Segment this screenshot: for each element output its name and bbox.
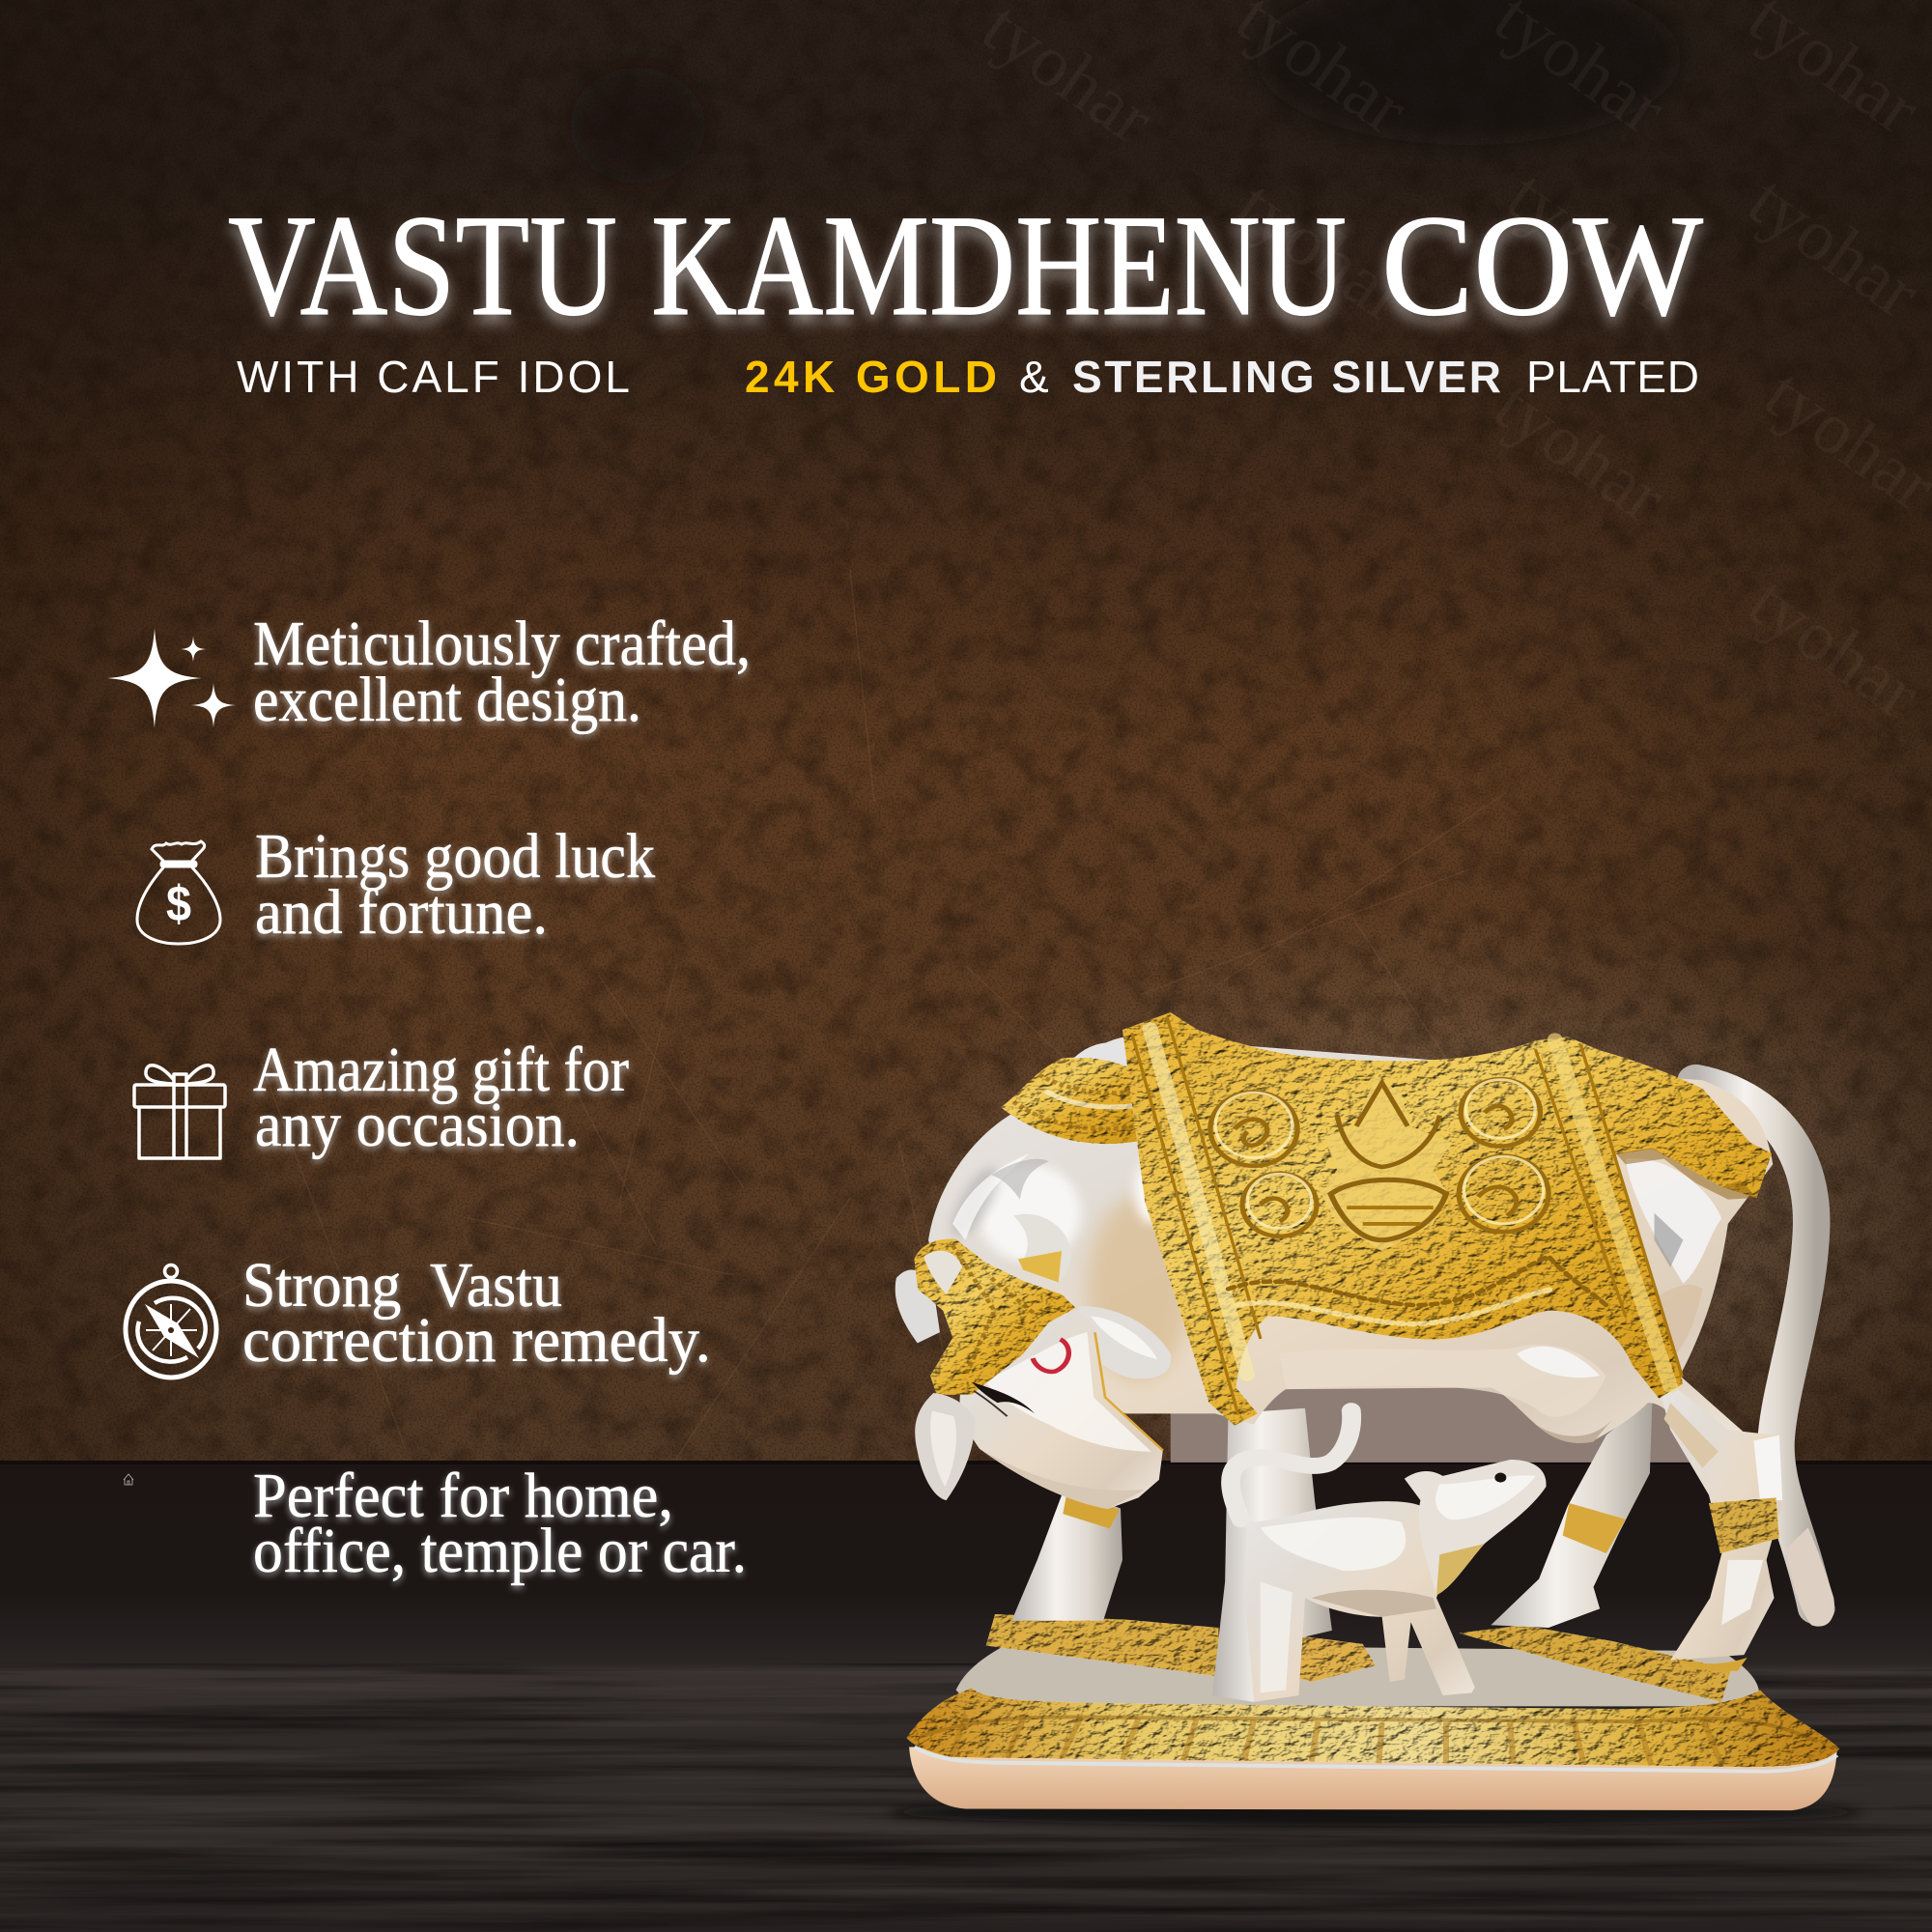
blanket medallions [1210, 1079, 1548, 1236]
feature 1: crafted [107, 609, 751, 735]
calf head [1405, 1460, 1547, 1595]
text: gift: Amazing gift for [253, 1035, 629, 1105]
eye [972, 1382, 1035, 1413]
left ear [915, 1393, 975, 1500]
body shading [944, 1153, 1721, 1443]
text: placement [253, 1461, 747, 1586]
face [960, 1310, 1163, 1509]
feature 4: vastu [126, 1250, 711, 1378]
text: placement: office, temple or car. [253, 1516, 747, 1586]
icon: tiny home [124, 1474, 133, 1485]
neck collar [1001, 1058, 1145, 1144]
subtitle: STERLING SILVER [1072, 352, 1501, 402]
silver hump [1073, 1042, 1127, 1063]
subtitle: WITH CALF IDOL [237, 352, 630, 402]
watermark: tyohar [968, 0, 1932, 734]
residual light backdrop between legs [1171, 1365, 1716, 1463]
tail [1696, 1080, 1834, 1627]
calf tail [1231, 1411, 1351, 1520]
plinth: gold hoof bases [986, 1614, 1731, 1702]
near foreleg [1011, 1487, 1122, 1621]
subtitle: 24K GOLD [745, 352, 997, 402]
text: vastu [242, 1250, 711, 1376]
watermark: tyohar: tyohar [1480, 364, 1680, 538]
background: textured wall [0, 0, 1932, 1488]
title: COW [1381, 185, 1703, 346]
icon: compass [126, 1265, 216, 1378]
subtitle: & [1019, 352, 1049, 402]
title: KAMDHENU [651, 185, 1347, 346]
watermark: tyohar: tyohar [1492, 155, 1692, 328]
icon: money bag [137, 841, 220, 944]
text: crafted: excellent design. [253, 665, 641, 735]
icon: sparkles [107, 628, 236, 728]
text: placement: Perfect for home, [253, 1461, 673, 1531]
base: wooden foot [909, 1747, 1837, 1810]
hind leg: outer [1655, 1370, 1782, 1671]
gold crown [914, 1238, 1076, 1395]
text: crafted [253, 609, 751, 735]
right ear [1078, 1306, 1171, 1378]
blanket [1122, 1012, 1772, 1426]
blanket rear fringe [1616, 1148, 1757, 1200]
title [228, 185, 1703, 346]
title: VASTU [228, 185, 617, 346]
text: luck: Brings good luck [255, 821, 655, 892]
icon: money bag: $ [166, 876, 191, 932]
feature 2: luck [137, 821, 655, 948]
watermark: tyohar: tyohar [1734, 159, 1932, 333]
subtitle: PLATED [1526, 352, 1699, 402]
subtitle [237, 352, 1699, 402]
text: luck [255, 821, 655, 948]
cow head [895, 1214, 1171, 1509]
blanket deity [1321, 1075, 1453, 1251]
text: vastu: Strong Vastu [242, 1250, 562, 1321]
feature 3: gift [134, 1035, 629, 1160]
base shadow [889, 1798, 1862, 1826]
calf body [1244, 1501, 1475, 1702]
tilak [1033, 1339, 1068, 1372]
far foreleg [1212, 1408, 1332, 1702]
blanket border bands [1132, 1018, 1682, 1413]
calf [1231, 1411, 1547, 1702]
background: dark wooden floor [0, 1461, 1932, 1932]
icon: gift box [134, 1065, 225, 1158]
text: crafted: Meticulously crafted, [253, 609, 751, 679]
text: gift [253, 1035, 629, 1160]
text: vastu: correction remedy. [242, 1305, 711, 1376]
base: silver top [956, 1644, 1759, 1706]
text: gift: any occasion. [255, 1090, 580, 1160]
watermark: tyohar: tyohar [1222, 164, 1422, 338]
feature 5: placement [124, 1461, 747, 1586]
horn [1013, 1214, 1071, 1284]
text: luck: and fortune. [255, 877, 548, 948]
base: gold band [906, 1688, 1839, 1772]
left horn stub [895, 1269, 940, 1343]
cow body [928, 1037, 1773, 1452]
watermark: tyohar: tyohar [1734, 560, 1932, 734]
illustration: gold and silver Kamdhenu cow with calf [889, 1012, 1862, 1826]
hind leg: inner [1491, 1398, 1653, 1628]
